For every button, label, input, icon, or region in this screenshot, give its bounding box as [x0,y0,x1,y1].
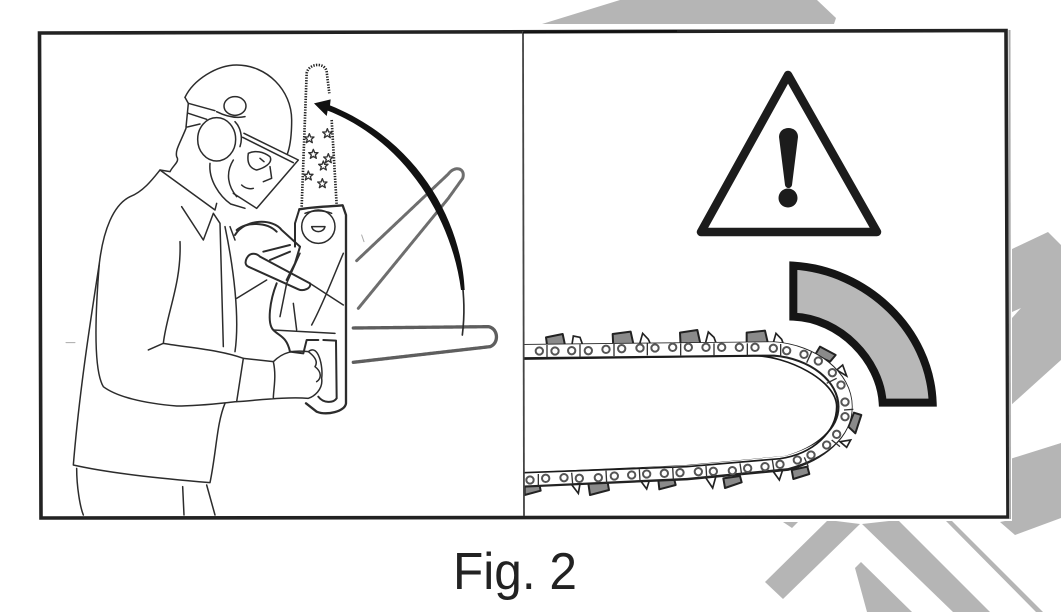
panel: kickback illustration [66,65,496,515]
front handle [235,222,310,290]
white notch in right watermark [1012,308,1021,318]
frame and divider [40,30,1010,519]
small stray mark [66,235,364,343]
icon: warning triangle [701,75,877,232]
chainsaw body [273,205,346,413]
exclamation mark [778,128,798,208]
saw rear grip [270,283,318,353]
saw chain [524,330,861,495]
white image backing [34,26,1012,521]
chain depth gauges [569,332,851,493]
ear muff [198,118,241,161]
chain band [524,349,845,480]
chain rollers [526,344,849,484]
jacket [73,128,267,483]
glove [237,350,322,402]
kickback danger zone [793,266,933,403]
ghost bar: horizontal position [353,327,496,362]
chain bar edge [524,356,837,473]
face shield and face [210,133,298,208]
panel: chain and kickback zone [524,266,933,495]
chain cutters [525,330,861,495]
legs [77,468,215,515]
chain link joints [538,343,853,485]
kickback arrow [314,99,465,335]
ghost bar: diagonal position [357,169,463,308]
chainsaw bar top [302,65,337,207]
chainsaw [235,65,346,413]
caption: Fig. 2 [453,543,577,601]
sparks [304,129,333,188]
helmet [185,65,292,154]
worker figure [73,65,322,515]
watermark background shapes [542,0,1061,612]
